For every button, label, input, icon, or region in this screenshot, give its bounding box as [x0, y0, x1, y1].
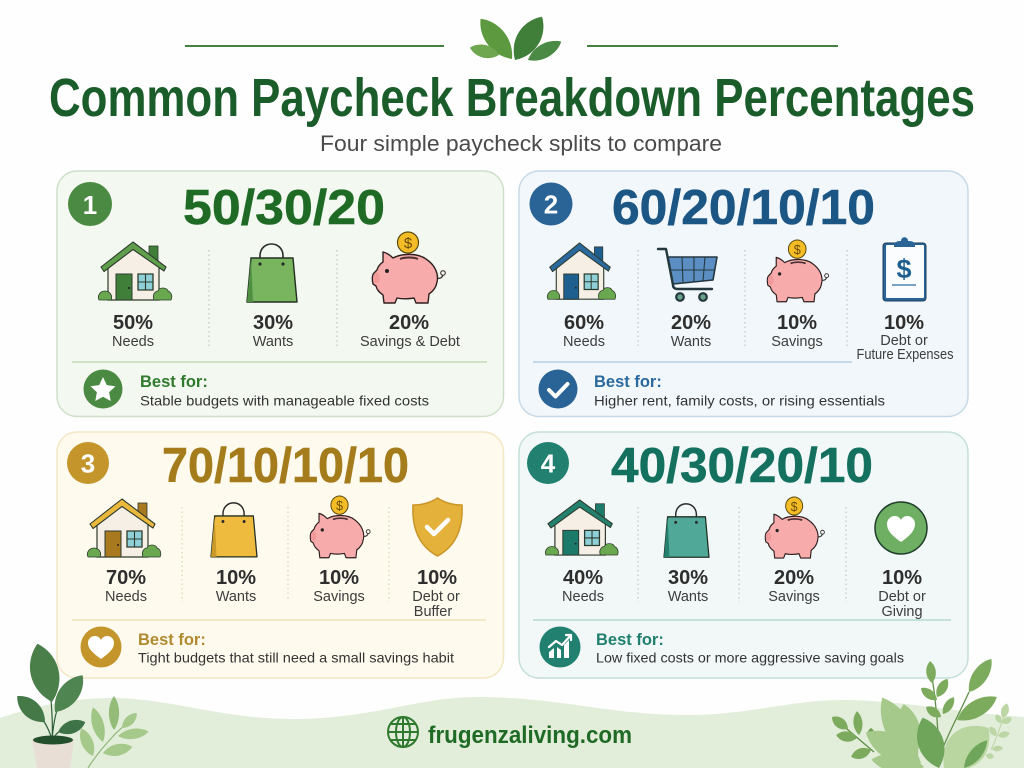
item: needs: Needs [563, 334, 605, 350]
item: savings: Savings [771, 334, 823, 350]
item: wants: Wants [671, 334, 711, 350]
item: wants [253, 312, 293, 350]
item: savings: 20% [774, 567, 814, 589]
icon: piggy bank [765, 497, 824, 558]
item: wants [668, 567, 708, 605]
icon: piggy bank [310, 496, 370, 558]
best for text: Tight budgets that still need a small savings habit [138, 650, 454, 666]
item: wants: Wants [668, 589, 708, 605]
icon: house [87, 499, 161, 557]
item: needs: 60% [564, 312, 604, 334]
item: wants: 20% [671, 312, 711, 334]
icon: star [84, 370, 122, 408]
icon: globe [388, 717, 418, 747]
item: wants: 30% [253, 312, 293, 334]
item: needs: Needs [105, 589, 147, 605]
header ornament [185, 11, 838, 66]
heading 40/30/20/10: 40/30/20/10 [611, 439, 873, 493]
item: wants: Wants [253, 334, 293, 350]
item: wants: Wants [216, 589, 256, 605]
item: savings: Savings [313, 589, 365, 605]
item: debt or future expenses: Debt or [880, 333, 928, 349]
plant: right foliage [829, 655, 1013, 768]
item: debt or future expenses: Future Expenses [856, 347, 954, 363]
icon: shopping bag [247, 244, 297, 302]
item: debt or future expenses: 10% [884, 312, 924, 334]
item: needs: 40% [563, 567, 603, 589]
best for text: Best for: [140, 373, 208, 391]
icon: clipboard [883, 237, 926, 301]
icon: clipboard: $ [896, 254, 912, 284]
panel: 70/10/10/10 [57, 432, 504, 678]
badge 3 [67, 442, 109, 484]
footer website: frugenzaliving.com [428, 722, 632, 749]
item: debt or buffer [412, 567, 460, 620]
item: wants: 30% [668, 567, 708, 589]
icon: piggy bank: $ [791, 499, 798, 514]
item: savings and debt: 20% [389, 312, 429, 334]
icon: piggy bank [372, 232, 445, 303]
item: debt or future expenses [856, 312, 954, 363]
item: wants [216, 567, 256, 605]
item: savings and debt: Savings & Debt [360, 334, 460, 350]
heading 60/20/10/10: 60/20/10/10 [612, 181, 875, 235]
badge 2 [530, 182, 572, 226]
icon: piggy bank [767, 240, 829, 302]
icon: check [538, 370, 578, 408]
best for text: Best for: [594, 373, 662, 391]
plant: left sprig [76, 696, 149, 768]
icon: house [547, 243, 616, 299]
item: needs: 70% [106, 567, 146, 589]
badge 3: 3 [81, 448, 95, 478]
best for text: Low fixed costs or more aggressive saving goals [596, 650, 904, 666]
icon: piggy bank: $ [336, 499, 343, 513]
item: wants: 10% [216, 567, 256, 589]
best for text [596, 631, 904, 666]
best for text [594, 373, 885, 408]
item: needs [563, 312, 605, 350]
item: debt or giving: Giving [881, 604, 923, 620]
best for text: Best for: [596, 631, 664, 649]
item: debt or giving [878, 567, 926, 620]
icon: growth chart [540, 626, 580, 668]
badge 1: 1 [83, 190, 97, 220]
icon: heart circle [875, 502, 927, 554]
best for text [140, 373, 429, 408]
plant: left potted [11, 640, 91, 768]
panel: 40/30/20/10 [519, 432, 968, 678]
badge 1 [68, 182, 112, 226]
item: needs [105, 567, 147, 605]
icon: house [545, 500, 618, 555]
best for text: Higher rent, family costs, or rising essentials [594, 392, 885, 408]
badge 2: 2 [544, 190, 558, 220]
item: debt or giving: Debt or [878, 589, 926, 605]
item: needs [562, 567, 604, 605]
panel: 60/20/10/10 [519, 171, 968, 416]
icon: shopping bag [211, 503, 257, 557]
item: savings [768, 567, 820, 605]
icon: house [98, 242, 172, 300]
item: debt or giving: 10% [882, 567, 922, 589]
item: savings and debt [360, 312, 460, 350]
badge 4: 4 [541, 448, 556, 478]
footer wave [0, 697, 1024, 768]
icon: piggy bank: $ [404, 235, 413, 252]
item: needs: Needs [112, 334, 154, 350]
item: savings: Savings [768, 589, 820, 605]
heading 50/30/20: 50/30/20 [183, 181, 385, 235]
item: savings: 10% [777, 312, 817, 334]
heading 70/10/10/10: 70/10/10/10 [162, 439, 409, 493]
item: wants [671, 312, 711, 350]
item: needs: Needs [562, 589, 604, 605]
best for text: Stable budgets with manageable fixed costs [140, 392, 429, 408]
item: needs: 50% [113, 312, 153, 334]
item: needs [112, 312, 154, 350]
subtitle: Four simple paycheck splits to compare [320, 131, 722, 156]
best for text: Best for: [138, 631, 206, 649]
icon: heart [80, 626, 122, 668]
item: debt or buffer: Buffer [414, 604, 452, 620]
item: savings [313, 567, 365, 605]
badge 4 [527, 442, 569, 484]
item: savings [771, 312, 823, 350]
item: savings: 10% [319, 567, 359, 589]
item: debt or buffer: 10% [417, 567, 457, 589]
icon: shield [413, 498, 462, 556]
icon: piggy bank: $ [794, 242, 801, 257]
panel: 50/30/20 [57, 171, 504, 416]
item: debt or buffer: Debt or [412, 589, 460, 605]
best for text [138, 631, 454, 666]
icon: shopping bag [664, 504, 709, 557]
icon: shopping cart [658, 249, 717, 301]
